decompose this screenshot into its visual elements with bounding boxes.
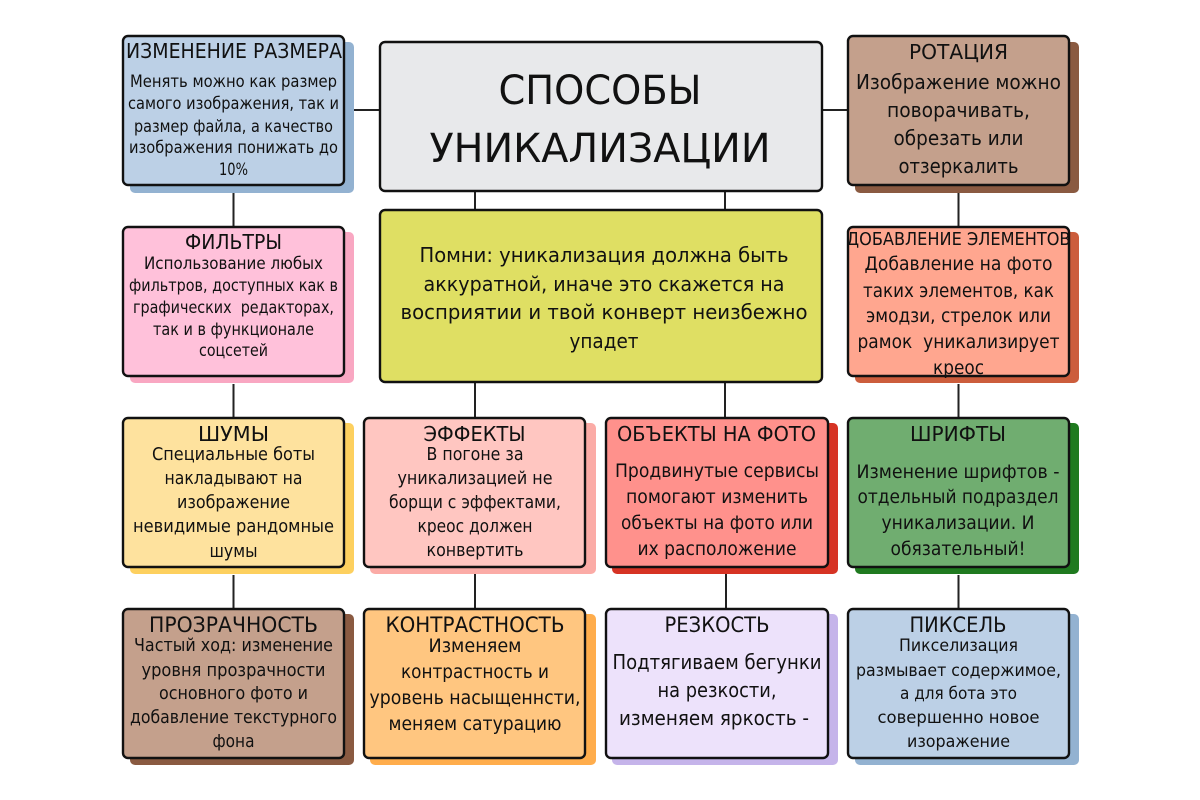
text: шрифты: уникализации. И (882, 513, 1034, 534)
text: объекты на фото (615, 461, 819, 560)
text: пиксель: размывает содержимое, (856, 660, 1061, 680)
text: фильтры: фильтров, доступных как в (129, 276, 338, 295)
text: изменение размера: 10% (219, 160, 248, 179)
text: пиксель: Пикселизация (899, 635, 1018, 655)
heading: фильтры: ФИЛЬТРЫ (185, 230, 282, 254)
text: контрастность: уровень насыщеннсти, (370, 688, 580, 709)
panel: добавление элементов (846, 227, 1079, 383)
text: прозрачность (130, 636, 337, 752)
text: ротация: Изображение можно (856, 70, 1061, 94)
heading: пиксель: ПИКСЕЛЬ (910, 613, 1006, 637)
heading: main title (430, 68, 770, 172)
panel: эффекты (364, 418, 596, 574)
heading: шумы: ШУМЫ (198, 422, 269, 446)
text: изменение размера: самого изображения, так и (128, 94, 339, 113)
text: ротация (856, 70, 1061, 178)
text: прозрачность: основного фото и (159, 684, 308, 704)
text: объекты на фото: помогают изменить (626, 487, 808, 508)
heading: ротация: РОТАЦИЯ (909, 40, 1008, 64)
panel: title (380, 42, 822, 191)
panel: контрастность (364, 609, 596, 765)
panel: reminder (380, 210, 822, 382)
text: эффекты: конвертить (426, 541, 524, 561)
text: эффекты: В погоне за (426, 445, 524, 465)
text: reminder (400, 243, 808, 353)
text: фильтры: графических редакторах, (133, 298, 334, 317)
text: reminder: Помни: уникализация должна быть (420, 243, 788, 267)
heading: изменение размера: ИЗМЕНЕНИЕ РАЗМЕРА (126, 39, 342, 63)
text: фильтры: так и в функционале (153, 320, 314, 339)
text: шрифты (856, 462, 1060, 560)
text: шумы: невидимые рандомные (133, 517, 334, 537)
text: резкость: изменяем яркость - (619, 706, 809, 730)
heading: эффекты: ЭФФЕКТЫ (424, 422, 526, 446)
text: шумы: накладывают на (164, 469, 302, 489)
heading: main title: УНИКАЛИЗАЦИИ (430, 126, 770, 172)
text: добавление элементов: рамок уникализирует (858, 332, 1060, 353)
text: резкость: на резкости, (658, 678, 776, 702)
text: изменение размера: Менять можно как размер (130, 72, 337, 91)
text: резкость (612, 650, 822, 730)
heading: main title: СПОСОБЫ (498, 68, 702, 114)
text: эффекты (389, 445, 561, 561)
heading: резкость: РЕЗКОСТЬ (664, 613, 770, 637)
text: контрастность (370, 636, 580, 735)
text: эффекты: креос должен (418, 517, 532, 537)
text: фильтры: соцсетей (199, 341, 268, 360)
text: reminder: аккуратной, иначе это скажется на (424, 272, 784, 296)
text: пиксель: изоражение (907, 731, 1010, 751)
text: шрифты: отдельный подраздел (858, 487, 1058, 508)
panel: прозрачность (123, 609, 354, 765)
text: прозрачность: Частый ход: изменение (134, 636, 333, 656)
heading: контрастность: КОНТРАСТНОСТЬ (386, 613, 564, 637)
heading: добавление элементов: ДОБАВЛЕНИЕ ЭЛЕМЕНТОВ (846, 229, 1070, 250)
text: шрифты: Изменение шрифтов - (856, 462, 1060, 483)
text: прозрачность: добавление текстурного (130, 708, 337, 728)
panel: фильтры (123, 227, 354, 383)
text: контрастность: контрастность и (401, 662, 549, 683)
text: ротация: поворачивать, (887, 98, 1030, 122)
text: шумы: изображение (177, 493, 290, 513)
text: объекты на фото: объекты на фото или (621, 513, 813, 534)
text: фильтры (129, 254, 338, 360)
text: добавление элементов: таких элементов, как (863, 281, 1054, 302)
text: объекты на фото: их расположение (638, 539, 796, 560)
text: пиксель: совершенно новое (878, 707, 1040, 727)
text: шумы: Специальные боты (152, 445, 315, 465)
panel: пиксель (848, 609, 1079, 765)
panel: шумы (123, 418, 354, 574)
text: добавление элементов (858, 254, 1060, 379)
text: объекты на фото: Продвинутые сервисы (615, 461, 819, 482)
text: добавление элементов: эмодзи, стрелок или (866, 306, 1051, 327)
panel: изменение размера (123, 36, 354, 193)
text: шумы: шумы (210, 542, 258, 562)
panel: ротация (848, 36, 1079, 193)
heading: объекты на фото: ОБЪЕКТЫ НА ФОТО (617, 422, 816, 446)
text: reminder: восприятии и твой конверт неизбежно (400, 300, 808, 324)
text: эффекты: уникализацией не (398, 469, 552, 489)
panel: шрифты (848, 418, 1079, 574)
text: добавление элементов: Добавление на фото (864, 254, 1052, 275)
text: резкость: Подтягиваем бегунки (612, 650, 822, 674)
text: пиксель (856, 635, 1061, 751)
heading: шрифты: ШРИФТЫ (910, 422, 1006, 446)
text: шрифты: обязательный! (890, 539, 1026, 560)
text: прозрачность: фона (212, 732, 254, 752)
text: ротация: обрезать или (894, 126, 1024, 150)
text: ротация: отзеркалить (898, 154, 1018, 178)
panel: объекты на фото (606, 418, 838, 574)
panel: резкость (606, 609, 838, 765)
text: контрастность: Изменяем (428, 636, 522, 657)
text: добавление элементов: креос (933, 358, 984, 379)
text: контрастность: меняем сатурацию (388, 714, 562, 735)
connector lines (234, 110, 958, 608)
text: эффекты: борщи с эффектами, (389, 493, 561, 513)
heading: прозрачность: ПРОЗРАЧНОСТЬ (149, 613, 318, 637)
text: reminder: упадет (570, 329, 639, 353)
text: фильтры: Использование любых (144, 254, 323, 273)
text: прозрачность: уровня прозрачности (142, 661, 326, 681)
text: изменение размера: размер файла, а качество (134, 117, 333, 136)
text: пиксель: а для бота это (900, 683, 1017, 703)
text: изменение размера: изображения понижать до (129, 138, 338, 157)
text: изменение размера (128, 72, 339, 179)
text: шумы (133, 445, 334, 562)
